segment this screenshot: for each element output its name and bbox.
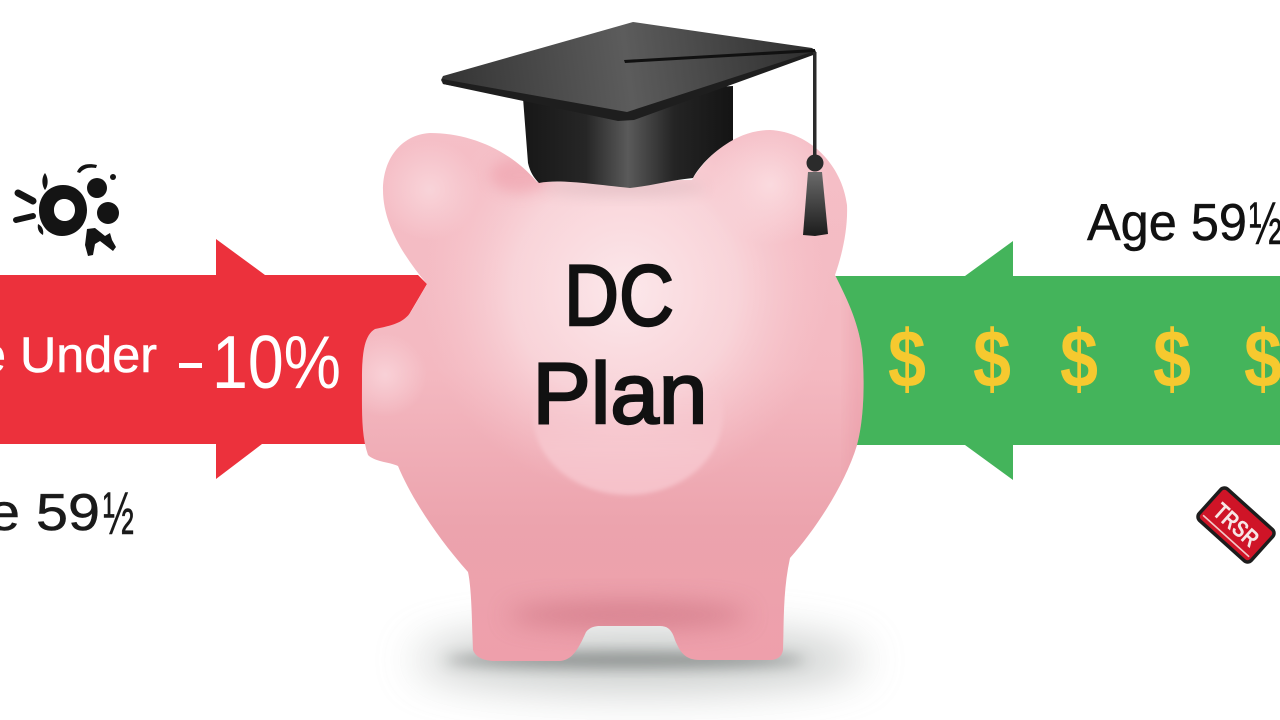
label: age 59 and a half, right: Age 59 xyxy=(1087,194,1247,252)
icon: black burst with ring and dots xyxy=(16,164,119,256)
dollar signs: $ xyxy=(973,314,1011,405)
dollar signs xyxy=(888,314,1280,405)
label: age 59 and a half, left: ½ xyxy=(103,480,134,547)
red arrow: withdrawal penalty xyxy=(0,239,427,479)
plan title xyxy=(532,248,708,442)
ground shadow xyxy=(415,630,865,690)
dollar signs: $ xyxy=(1060,314,1098,405)
dollar signs: $ xyxy=(1153,314,1191,405)
plan title: DC xyxy=(564,248,674,344)
dollar signs: $ xyxy=(888,314,926,405)
plan title: Plan xyxy=(532,346,708,442)
graduation cap xyxy=(441,22,828,236)
label: age 59 and a half, left xyxy=(0,480,134,547)
tassel xyxy=(803,52,828,236)
icon: red tag with lettering xyxy=(1196,486,1276,564)
piggy bank xyxy=(362,130,864,661)
green arrow: contributions xyxy=(820,241,1280,480)
arrow label: minus ten percent: 10% xyxy=(212,320,341,404)
icon: red tag with lettering: TRSR xyxy=(1207,498,1264,553)
